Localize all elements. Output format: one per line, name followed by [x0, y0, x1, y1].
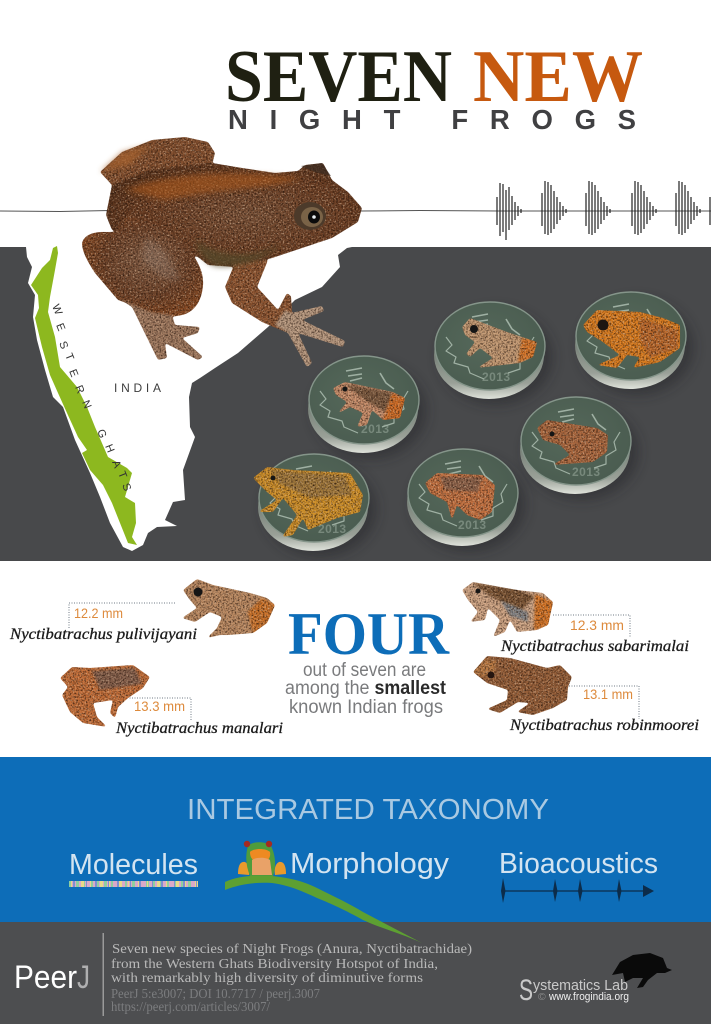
- icon: call signal: [501, 878, 654, 903]
- logo: Systematics Lab: www.frogindia.org: [548, 991, 629, 1003]
- coin with frog: bottom centre: [407, 449, 526, 552]
- citation text: with remarkably high diversity of diminutive forms: [111, 970, 423, 985]
- citation text: Seven new species of Night Frogs (Anura, Nyctibatrachidae): [112, 941, 472, 956]
- heading: integrated taxonomy: INTEGRATED TAXONOMY: [187, 794, 549, 826]
- logo: Systematics Lab: ©: [538, 991, 546, 1003]
- coin with frog: top right: [575, 292, 694, 395]
- coin with frog: top centre: [434, 302, 553, 405]
- logo: Systematics Lab: ystematics Lab: [533, 977, 628, 994]
- image: large night frog: [82, 137, 362, 367]
- logo: Systematics Lab: [519, 974, 629, 1007]
- coin with frog: bottom centre: 2013: [458, 518, 486, 532]
- citation text: PeerJ 5:e3007; DOI 10.7717 / peerj.3007: [111, 986, 320, 1001]
- species: Nyctibatrachus sabarimalai: Nyctibatrachus sabarimalai: [500, 638, 689, 655]
- icon: DNA barcode: [69, 881, 198, 887]
- map label: India: INDIA: [114, 381, 161, 395]
- species: Nyctibatrachus manalari: 13.3 mm: [134, 699, 185, 714]
- coin with frog: bottom left: 2013: [318, 522, 346, 536]
- title: SEVEN: [225, 36, 452, 118]
- headline: Four: FOUR: [288, 601, 450, 667]
- title: NEW: [473, 36, 643, 118]
- logo: Systematics Lab: S: [519, 974, 533, 1007]
- species: Nyctibatrachus sabarimalai: 12.3 mm: [570, 618, 624, 633]
- species: Nyctibatrachus sabarimalai: [462, 582, 689, 655]
- species: Nyctibatrachus robinmoorei: 13.1 mm: [583, 687, 633, 702]
- coin with frog: bottom left: [253, 454, 377, 557]
- citation text: https://peerj.com/articles/3007/: [111, 999, 270, 1014]
- coin with frog: right: 2013: [572, 465, 600, 479]
- text: out of seven: among the smallest: [285, 678, 447, 699]
- coin with frog: top centre: 2013: [482, 370, 510, 384]
- citation text: [111, 941, 472, 1014]
- map label: Western Ghats: WESTERNGHATS: [49, 303, 133, 493]
- panel: smallest frogs: [0, 561, 711, 757]
- panel: integrated taxonomy: [0, 757, 711, 922]
- panel: dark grey map band: [0, 247, 711, 561]
- title: NIGHT FROGS: [228, 104, 636, 135]
- label: molecules: Molecules: [69, 849, 198, 881]
- species: Nyctibatrachus pulivijayani: Nyctibatrachus pulivijayani: [9, 626, 197, 643]
- species: Nyctibatrachus pulivijayani: [9, 579, 275, 643]
- citation text: from the Western Ghats Biodiversity Hotspot of India,: [111, 956, 438, 971]
- map: southern India: [26, 246, 352, 551]
- icon: black frog silhouette: [612, 953, 672, 988]
- label: bioacoustics: Bioacoustics: [499, 848, 658, 880]
- logo: PeerJ: Peer: [14, 959, 77, 995]
- logo: PeerJ: J: [77, 959, 90, 995]
- text: out of seven: [285, 660, 447, 718]
- illustration: leaf: [225, 876, 422, 943]
- panel: footer: [0, 922, 711, 1024]
- waveform: frog call: [0, 181, 711, 240]
- label: morphology: Morphology: [290, 848, 450, 880]
- coin with frog: left of centre: 2013: [361, 422, 389, 436]
- coin with frog: right: [520, 397, 639, 500]
- divider: [102, 933, 104, 1016]
- species: Nyctibatrachus robinmoorei: Nyctibatrachus robinmoorei: [509, 717, 699, 734]
- map region: Western Ghats: [31, 246, 137, 545]
- text: out of seven: known Indian frogs: [289, 697, 443, 718]
- text: out of seven: out of seven are: [303, 660, 426, 681]
- coin with frog: left of centre: [308, 356, 427, 459]
- species: Nyctibatrachus manalari: [60, 665, 283, 737]
- illustration: tree frog: [238, 841, 286, 876]
- species: Nyctibatrachus robinmoorei: [473, 656, 699, 734]
- species: Nyctibatrachus pulivijayani: 12.2 mm: [74, 606, 123, 621]
- species: Nyctibatrachus manalari: Nyctibatrachus manalari: [115, 720, 283, 737]
- title: [225, 36, 643, 135]
